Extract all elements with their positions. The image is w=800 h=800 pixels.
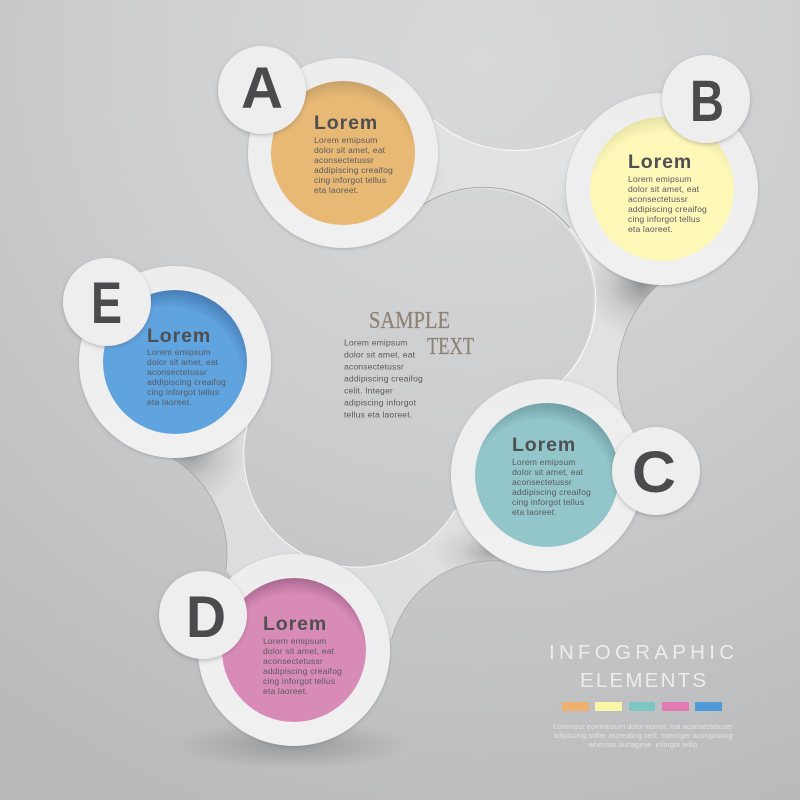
center text block: celit. Integer <box>344 386 393 396</box>
text A: Lorem <box>314 112 378 134</box>
badge C <box>612 427 700 515</box>
center heading: SAMPLE <box>369 308 450 334</box>
text A: eta laoreet. <box>314 185 359 195</box>
title: infographic elements: INFOGRAPHIC <box>549 641 734 664</box>
text D: aconsectetussr <box>263 656 323 666</box>
panel: B <box>566 55 758 285</box>
footer text <box>553 722 733 749</box>
text B: cing inforgot tellus <box>628 214 700 224</box>
panel: E <box>63 258 271 458</box>
color disc C <box>475 403 619 547</box>
text B: dolor sit amet, eat <box>628 184 700 194</box>
text E: Lorem <box>147 325 211 347</box>
center text block: dolor sit amet, eat <box>344 350 416 360</box>
panel: D <box>159 554 390 746</box>
floor shadow under D <box>174 721 410 769</box>
panel: A <box>218 46 438 248</box>
color legend <box>562 702 722 711</box>
text E: aconsectetussr <box>147 367 207 377</box>
color disc E <box>103 290 247 434</box>
center text block <box>344 338 423 420</box>
center text block: aconsectetussr <box>344 362 404 372</box>
ring B <box>566 93 758 285</box>
text B: Lorem emipsum <box>628 174 692 184</box>
title: infographic elements: ELEMENTS <box>580 669 706 692</box>
text E: cing inforgot tellus <box>147 387 219 397</box>
ring E <box>79 266 271 458</box>
text B: addipiscing creaifog <box>628 204 707 214</box>
badge B <box>662 55 750 143</box>
text B <box>628 151 707 234</box>
color disc B <box>590 117 734 261</box>
color disc A <box>271 81 415 225</box>
badge D <box>159 571 247 659</box>
footer text: adipiscing soller ascrealing selit. Interriger ausrgpisting <box>553 731 733 740</box>
text E: dolor sit amet, eat <box>147 357 219 367</box>
badge E <box>63 258 151 346</box>
text D: addipiscing creaifog <box>263 666 342 676</box>
badge A: A <box>241 56 283 121</box>
text B: Lorem <box>628 151 692 173</box>
text E: Lorem emipsum <box>147 347 211 357</box>
text C: Lorem <box>512 434 576 456</box>
ring A <box>248 58 438 248</box>
center text block: Lorem emipsum <box>344 338 408 348</box>
text A: addipiscing creaifog <box>314 165 393 175</box>
text C: addipiscing creaifog <box>512 487 591 497</box>
badge B: B <box>690 69 724 134</box>
text C: eta laoreet. <box>512 507 557 517</box>
text D: dolor sit amet, eat <box>263 646 335 656</box>
footer text: wheuser ourtagese. inforgot tellip <box>588 740 697 749</box>
color disc D <box>222 578 366 722</box>
text E: addipiscing creaifog <box>147 377 226 387</box>
text C: aconsectetussr <box>512 477 572 487</box>
text A: aconsectetussr <box>314 155 374 165</box>
center heading: TEXT <box>427 334 474 360</box>
center text block: addipiscing creaifog <box>344 374 423 384</box>
ring D <box>198 554 390 746</box>
text D <box>263 613 342 696</box>
text C: cing inforgot tellus <box>512 497 584 507</box>
text D: Lorem <box>263 613 327 635</box>
text C: Lorem emipsum <box>512 457 576 467</box>
title: infographic elements <box>549 641 734 692</box>
text E <box>147 325 226 407</box>
text B: eta laoreet. <box>628 224 673 234</box>
badge C: C <box>632 440 676 505</box>
text B: aconsectetussr <box>628 194 688 204</box>
text C: dolor sit amet, eat <box>512 467 584 477</box>
text A: dolor sit amet, eat <box>314 145 386 155</box>
text A: Lorem emipsum <box>314 135 378 145</box>
panel: C <box>451 379 700 571</box>
badge A <box>218 46 306 134</box>
text A <box>314 112 393 195</box>
text D: eta laoreet. <box>263 686 308 696</box>
text D: Lorem emipsum <box>263 636 327 646</box>
center text block: tellus eta laoreet. <box>344 410 412 420</box>
center heading <box>369 308 474 360</box>
text E: eta laoreet. <box>147 397 192 407</box>
text A: cing inforgot tellus <box>314 175 386 185</box>
footer text: Loremour eomnipsum dolor eumet, eat aconsectetuser <box>553 722 733 731</box>
badge D: D <box>186 585 226 650</box>
center text block: adipiscing inforgot <box>344 398 417 408</box>
text C <box>512 434 591 517</box>
badge E: E <box>91 271 122 336</box>
connector band <box>172 120 658 638</box>
text D: cing inforgot tellus <box>263 676 335 686</box>
ring C <box>451 379 643 571</box>
